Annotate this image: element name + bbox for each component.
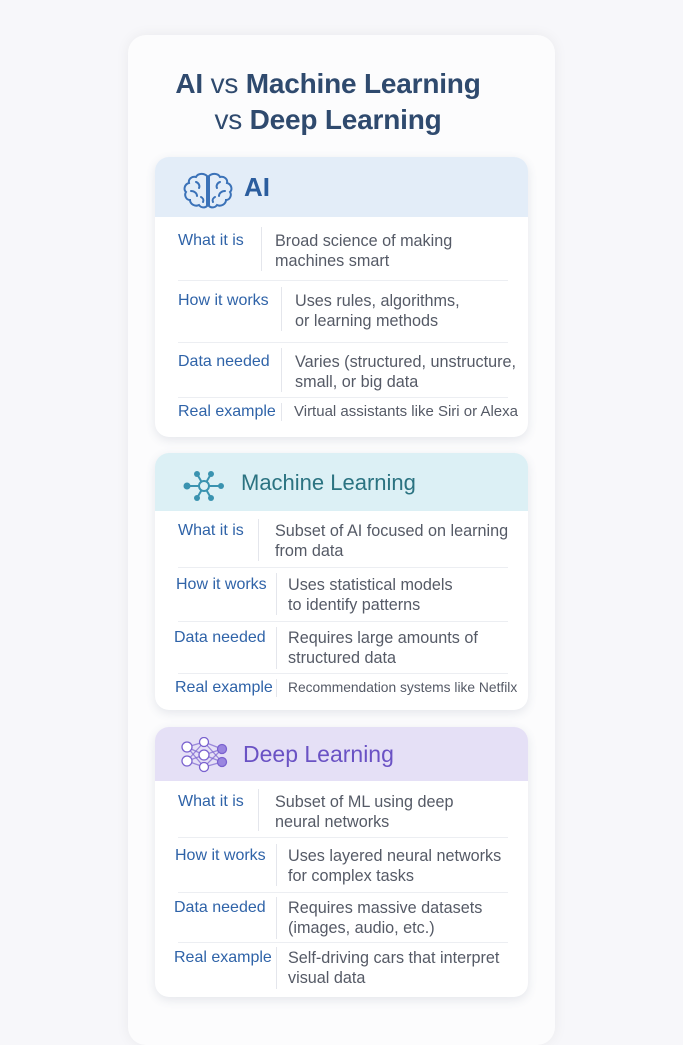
panel: Machine Learning: structured data: [288, 649, 396, 667]
row: what it is: What it is: [178, 793, 244, 810]
row: real example: Real example: [174, 949, 272, 966]
panel: AI: Uses rules, algorithms,: [295, 292, 460, 310]
row: data needed: Data needed: [174, 629, 266, 646]
icon: brain: [184, 172, 232, 208]
panel: Machine Learning: Subset of AI focused on learning: [275, 522, 508, 540]
header: AI: AI: [244, 172, 270, 202]
header: ML: [155, 453, 528, 511]
panel: Deep Learning: neural networks: [275, 813, 389, 831]
panel: AI: machines smart: [275, 252, 389, 270]
row: how it works: How it works: [175, 847, 266, 864]
panel: Deep Learning: visual data: [288, 969, 365, 987]
row: how it works: How it works: [176, 576, 267, 593]
panel: AI: Varies (structured, unstructure,: [295, 353, 516, 371]
title: AI vs Machine Learning: [175, 68, 481, 99]
panel: Machine Learning: [155, 453, 528, 710]
row: how it works: How it works: [178, 292, 269, 309]
icon: neural network: [181, 737, 228, 772]
panel: Deep Learning: [155, 727, 528, 997]
row: what it is: What it is: [178, 522, 244, 539]
panel: Deep Learning: Self-driving cars that interpret: [288, 949, 499, 967]
header: ML: Machine Learning: [241, 470, 416, 495]
header: DL: [155, 727, 528, 781]
row: what it is: What it is: [178, 232, 244, 249]
title: [175, 68, 481, 135]
panel: Deep Learning: Uses layered neural networks: [288, 847, 501, 865]
panel: Machine Learning: Uses statistical models: [288, 576, 453, 594]
row: real example: Real example: [178, 403, 276, 420]
panel: AI: or learning methods: [295, 312, 438, 330]
panel: AI: Broad science of making: [275, 232, 452, 250]
header: AI: [155, 157, 528, 217]
icon: network: [184, 471, 224, 501]
title: vs Deep Learning: [214, 104, 442, 135]
outer panel: [128, 35, 555, 1045]
row: data needed: Data needed: [174, 899, 266, 916]
panel: AI: [155, 157, 528, 437]
header: DL: Deep Learning: [243, 741, 394, 767]
panel: Deep Learning: Requires massive datasets: [288, 899, 482, 917]
panel: Machine Learning: from data: [275, 542, 343, 560]
panel: Machine Learning: Recommendation systems like Netfilx: [288, 680, 517, 695]
row: real example: Real example: [175, 679, 273, 696]
row: data needed: Data needed: [178, 353, 270, 370]
panel: Deep Learning: Subset of ML using deep: [275, 793, 453, 811]
panel: AI: small, or big data: [295, 373, 418, 391]
panel: Machine Learning: to identify patterns: [288, 596, 420, 614]
panel: Deep Learning: for complex tasks: [288, 867, 414, 885]
panel: AI: Virtual assistants like Siri or Alexa: [294, 403, 518, 420]
panel: Machine Learning: Requires large amounts of: [288, 629, 478, 647]
panel: Deep Learning: (images, audio, etc.): [288, 919, 435, 937]
